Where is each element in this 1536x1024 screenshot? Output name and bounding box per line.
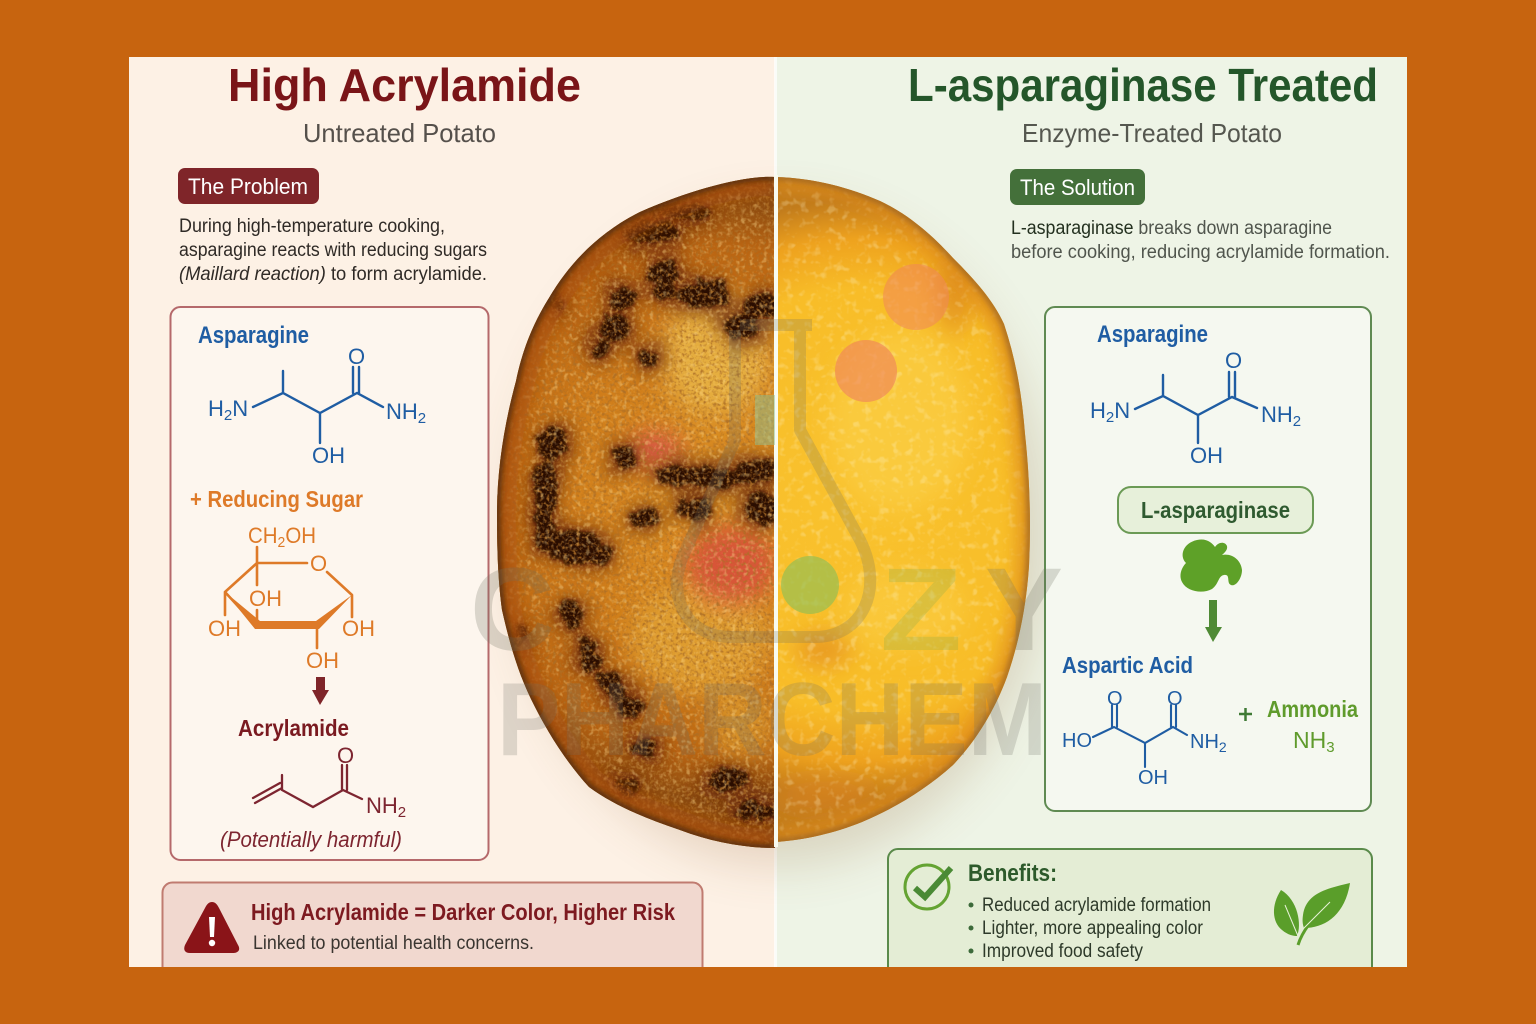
molecule: asparagine: 2 — [224, 407, 232, 424]
molecule: reducing sugar: OH — [285, 523, 316, 548]
watermark wordmark top: Z — [880, 544, 962, 676]
title: High Acrylamide: High Acrylamide — [228, 59, 581, 111]
molecule: aspartic acid: 2 — [1219, 739, 1227, 755]
panel: enzyme breakdown reaction — [1045, 307, 1371, 811]
badge: The Solution: The Solution — [1020, 175, 1135, 200]
problem description: During high-temperature cooking, — [179, 216, 445, 237]
benefits list: Lighter, more appealing color — [982, 918, 1204, 939]
subtitle: Untreated Potato: Untreated Potato — [303, 118, 496, 148]
potato divider — [774, 175, 778, 847]
molecule: aspartic acid: HO — [1062, 730, 1092, 752]
icon: green leaves — [1274, 883, 1350, 945]
panel: enzyme-treated potato background — [775, 57, 1407, 967]
molecule: aspartic acid: O — [1167, 688, 1183, 710]
benefits list: Reduced acrylamide formation — [982, 895, 1211, 916]
icon: check mark — [905, 865, 951, 909]
label: Asparagine: Asparagine — [1097, 321, 1208, 348]
molecule: aspartic acid — [1062, 688, 1227, 789]
molecule: asparagine: O — [348, 344, 365, 369]
problem description: (Maillard reaction) to form acrylamide. — [179, 264, 487, 285]
label: Ammonia NH3: Ammonia — [1267, 696, 1358, 722]
title: L-asparaginase Treated: L-asparaginase Treated — [908, 59, 1378, 111]
arrow: to aspartic acid — [1205, 600, 1222, 642]
panel: reaction forming acrylamide — [170, 307, 488, 860]
solution description: before cooking, reducing acrylamide formation. — [1011, 242, 1390, 263]
molecule: acrylamide: O — [337, 743, 354, 768]
molecule: acrylamide — [253, 743, 406, 821]
centre divider — [774, 57, 777, 967]
note: potentially harmful: (Potentially harmful) — [220, 827, 402, 852]
label: Reducing Sugar: + Reducing Sugar — [190, 486, 363, 512]
molecule: asparagine: O — [1225, 348, 1242, 373]
watermark wordmark top: C — [470, 544, 555, 676]
potato illustration — [490, 170, 1048, 865]
label: Asparagine: Asparagine — [198, 322, 309, 349]
molecule: asparagine: H — [208, 396, 224, 421]
watermark logo — [470, 264, 1063, 778]
enzyme label: L-asparaginase — [1118, 487, 1313, 533]
left heading block — [228, 59, 581, 148]
molecule: acrylamide: NH — [366, 793, 398, 818]
enzyme label: L-asparaginase: L-asparaginase — [1141, 497, 1290, 523]
badge: The Problem: The Problem — [188, 174, 308, 199]
panel: benefits callout — [887, 848, 1373, 967]
molecule: aspartic acid: NH — [1190, 731, 1219, 753]
watermark wordmark top — [470, 544, 1063, 676]
molecule: reducing sugar: O — [310, 551, 327, 576]
right heading block — [908, 59, 1378, 148]
arrow: to acrylamide — [312, 677, 329, 705]
molecule: asparagine: OH — [1190, 443, 1223, 468]
label: Ammonia NH3 — [1267, 696, 1358, 756]
problem description — [179, 216, 487, 285]
watermark wordmark bottom: PHARCHEM — [497, 662, 1047, 778]
plus sign — [1239, 708, 1252, 721]
molecule: reducing sugar: CH — [248, 523, 280, 548]
molecule: asparagine: OH — [312, 443, 345, 468]
molecule: asparagine: 2 — [1106, 409, 1114, 426]
left half: charred rim — [497, 177, 775, 848]
right half: crisp rim — [775, 177, 1030, 842]
benefits list — [968, 895, 1211, 962]
molecule: reducing sugar: OH — [342, 616, 375, 641]
molecule: reducing sugar: 2 — [278, 534, 285, 551]
panel: warning callout — [162, 882, 704, 967]
label: Ammonia NH3: NH — [1293, 727, 1326, 753]
watermark molecule dots — [755, 264, 949, 614]
molecule: reducing sugar: OH — [208, 616, 241, 641]
molecule: aspartic acid: O — [1107, 688, 1123, 710]
icon: warning triangle — [184, 902, 239, 953]
label: Acrylamide: Acrylamide — [238, 715, 349, 741]
molecule: reducing sugar — [208, 523, 375, 673]
warning text: Linked to potential health concerns. — [253, 933, 534, 954]
molecule: reducing sugar: OH — [249, 586, 282, 611]
label: Aspartic Acid: Aspartic Acid — [1062, 652, 1193, 678]
molecule: asparagine: N — [232, 396, 248, 421]
potato cast shadow — [512, 205, 1048, 865]
icon: enzyme blob — [1181, 540, 1242, 592]
badge: The Solution — [1010, 169, 1145, 205]
molecule: asparagine — [208, 344, 426, 468]
molecule: asparagine: H — [1090, 398, 1106, 423]
molecule: asparagine: 2 — [1293, 413, 1301, 430]
molecule: acrylamide: 2 — [398, 804, 406, 821]
molecule: reducing sugar: OH — [306, 648, 339, 673]
watermark wordmark top: Y — [985, 544, 1063, 676]
molecule: asparagine: NH — [1261, 402, 1293, 427]
badge: The Problem — [178, 168, 319, 204]
benefits list: Improved food safety — [982, 941, 1143, 962]
molecule: aspartic acid: OH — [1138, 767, 1168, 789]
solution description: L-asparaginase breaks down asparagine — [1011, 218, 1332, 239]
problem description: asparagine reacts with reducing sugars — [179, 240, 487, 261]
molecule: asparagine: 2 — [418, 410, 426, 427]
watermark flask — [677, 325, 870, 637]
left half: burnt potato — [490, 170, 780, 855]
molecule: asparagine — [1090, 348, 1301, 468]
solution description — [1011, 218, 1390, 263]
molecule: asparagine: NH — [386, 399, 418, 424]
warning heading: High Acrylamide = Darker Color, Higher Risk — [251, 899, 675, 925]
label: Ammonia NH3: 3 — [1326, 739, 1335, 756]
molecule: asparagine: N — [1114, 398, 1130, 423]
benefits heading: Benefits: — [968, 860, 1057, 887]
panel: untreated potato background — [129, 57, 775, 967]
subtitle: Enzyme-Treated Potato: Enzyme-Treated Potato — [1022, 118, 1282, 148]
right half: golden potato — [775, 170, 1035, 850]
